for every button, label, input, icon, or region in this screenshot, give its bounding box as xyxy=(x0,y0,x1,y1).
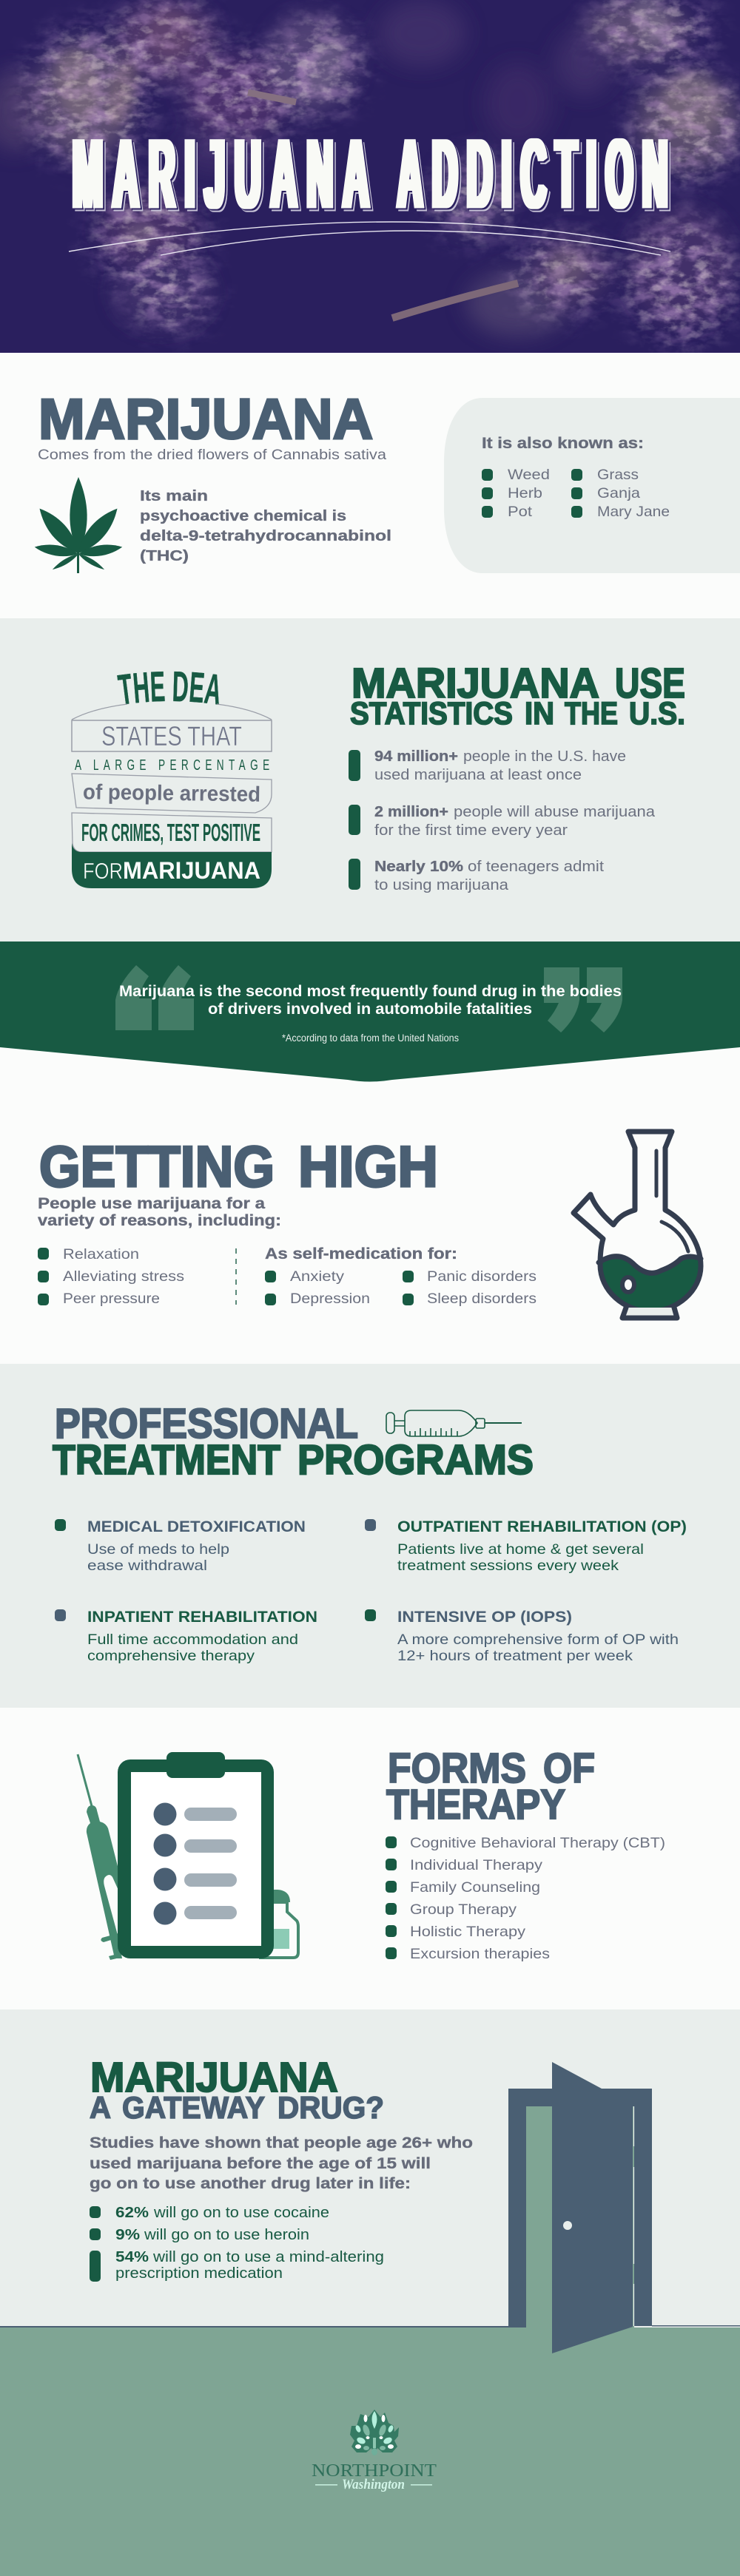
list: self-medication: Sleep disorders xyxy=(427,1291,536,1307)
text: origin: Comes from the dried flowers of Cannabis sativa xyxy=(38,447,386,463)
item: intensive outpatient: INTENSIVE OP (IOPS) xyxy=(397,1609,572,1626)
decorative title swoosh xyxy=(69,222,670,255)
list: street names: Herb xyxy=(508,485,542,501)
heading: forms of therapy: FORMS xyxy=(388,1745,526,1792)
panel: getting high xyxy=(38,1132,701,1318)
heading: a gateway drug xyxy=(90,2054,384,2125)
heading: marijuana use statistics: STATISTICS xyxy=(350,696,513,731)
list: therapies: Individual Therapy xyxy=(410,1857,542,1873)
heading: forms of therapy: THERAPY xyxy=(386,1781,565,1828)
stat: prescription medication: prescription medication xyxy=(115,2265,283,2282)
badge: DEA statement: FOR CRIMES, TEST POSITIVE xyxy=(81,819,260,846)
stat: 94 million: people in the U.S. have xyxy=(463,748,626,765)
text: gateway study: go on to use another drug later in life: xyxy=(90,2175,411,2192)
list: street names: Ganja xyxy=(597,485,640,501)
text: gateway study: used marijuana before the age of 15 will xyxy=(90,2155,431,2172)
badge: DEA statement: A LARGE PERCENTAGE xyxy=(75,757,269,774)
list: street names: Mary Jane xyxy=(597,504,670,520)
list: therapies: Cognitive Behavioral Therapy (CBT) xyxy=(410,1835,665,1851)
text: THC description xyxy=(140,487,391,564)
list: street names: Pot xyxy=(508,504,533,520)
stat: 94 million: used marijuana at least once xyxy=(374,767,582,783)
heading: forms of therapy: OF xyxy=(543,1745,595,1792)
list: therapies: Group Therapy xyxy=(410,1901,517,1918)
icon: bong xyxy=(574,1132,701,1318)
stat: nearly 10 percent: to using marijuana xyxy=(374,877,509,893)
stat: 94 million xyxy=(349,748,626,783)
icon: clipboard xyxy=(118,1752,274,1958)
list: street names xyxy=(482,467,670,520)
item: medical detoxification: ease withdrawal xyxy=(87,1558,207,1574)
stat: 2 million xyxy=(349,804,656,839)
panel: also known as xyxy=(444,398,740,573)
badge: DEA statement: STATES THAT xyxy=(101,721,242,751)
list: self-medication xyxy=(265,1245,536,1307)
text: gateway study xyxy=(90,2134,473,2192)
heading: a gateway drug: A xyxy=(90,2090,111,2125)
text: THC description: (THC) xyxy=(140,547,189,564)
text: quote xyxy=(119,983,622,1018)
item: medical detoxification xyxy=(55,1518,306,1574)
list: reasons: Alleviating stress xyxy=(63,1268,184,1285)
stat: cocaine xyxy=(90,2205,329,2221)
item: outpatient rehabilitation: Patients live at home & get several xyxy=(397,1541,644,1558)
heading: marijuana use statistics xyxy=(350,660,685,731)
stat: 2 million: 2 million+ xyxy=(374,804,448,820)
stat: 2 million: for the first time every year xyxy=(374,822,568,839)
list: reasons: Peer pressure xyxy=(63,1291,160,1307)
list: self-medication: Anxiety xyxy=(290,1268,344,1285)
badge: DEA statement: of people arrested xyxy=(83,780,260,807)
item: outpatient rehabilitation: treatment sessions every week xyxy=(397,1558,619,1574)
text: quote: of drivers involved in automobile fatalities xyxy=(208,1001,532,1018)
text: washington script: Washington xyxy=(342,2477,405,2492)
panel: quote banner xyxy=(0,942,740,1081)
text: gateway study: Studies have shown that people age 26+ who xyxy=(90,2134,473,2151)
list: self-medication: As self-medication for: xyxy=(265,1245,457,1262)
heading: professional treatment programs: PROFESSIONAL xyxy=(55,1400,358,1447)
heading: professional treatment programs xyxy=(53,1400,534,1484)
text: reasons intro: People use marijuana for a xyxy=(38,1195,265,1212)
stat: prescription medication: will go on to use a mind-altering xyxy=(152,2249,384,2265)
logo: northpoint washington xyxy=(312,2410,437,2492)
list: therapies: Excursion therapies xyxy=(410,1946,550,1962)
heading: a gateway drug: GATEWAY xyxy=(122,2090,265,2125)
list: therapies: Family Counseling xyxy=(410,1879,540,1896)
heading: also known as: It is also known as: xyxy=(482,435,644,452)
item: medical detoxification: MEDICAL DETOXIFICATION xyxy=(87,1518,306,1535)
heading: professional treatment programs: TREATMENT xyxy=(53,1436,280,1484)
item: outpatient rehabilitation xyxy=(365,1518,687,1574)
heading: forms of therapy xyxy=(386,1745,595,1828)
text: THC description: psychoactive chemical is xyxy=(140,507,346,524)
item: medical detoxification: Use of meds to help xyxy=(87,1541,229,1558)
stat: heroin xyxy=(90,2227,309,2243)
heading: a gateway drug: DRUG? xyxy=(278,2090,384,2125)
text: quote: Marijuana is the second most frequently found drug in the bodies xyxy=(119,983,622,1000)
icon: medicine bottle xyxy=(259,1890,298,1958)
heading: getting high: HIGH xyxy=(298,1134,438,1199)
badge: DEA statement xyxy=(71,672,272,888)
badge: DEA statement: MARIJUANA xyxy=(123,857,260,884)
stat: heroin: will go on to use heroin xyxy=(144,2227,309,2243)
stat: nearly 10 percent xyxy=(349,859,604,893)
item: inpatient rehabilitation xyxy=(55,1609,317,1664)
item: intensive outpatient: 12+ hours of treatment per week xyxy=(397,1648,633,1664)
list: street names: Grass xyxy=(597,467,639,483)
panel: hero banner xyxy=(0,0,740,353)
heading: marijuana use statistics: U.S. xyxy=(629,696,685,731)
icon: syringe xyxy=(386,1410,522,1436)
text: reasons intro: variety of reasons, including: xyxy=(38,1212,281,1229)
list: street names: Weed xyxy=(508,467,550,483)
icon: open door xyxy=(508,2062,652,2353)
heading: marijuana use statistics: THE xyxy=(565,696,618,731)
stat: nearly 10 percent: Nearly 10% xyxy=(374,859,463,875)
stat: 2 million: people will abuse marijuana xyxy=(454,804,656,820)
heading: getting high: GETTING xyxy=(39,1134,275,1199)
list: self-medication: Panic disorders xyxy=(427,1268,536,1285)
icon: closing quote mark xyxy=(544,967,622,1032)
item: inpatient rehabilitation: INPATIENT REHABILITATION xyxy=(87,1609,317,1626)
item: outpatient rehabilitation: OUTPATIENT REHABILITATION (OP) xyxy=(397,1518,687,1535)
stat: cocaine: 62% xyxy=(115,2205,149,2221)
heading: marijuana: MARIJUANA xyxy=(38,388,373,451)
stat: cocaine: will go on to use cocaine xyxy=(153,2205,329,2221)
panel: treatment programs xyxy=(0,1364,740,1708)
panel: getting high background xyxy=(0,1035,740,1364)
item: inpatient rehabilitation: Full time accommodation and xyxy=(87,1632,298,1648)
list: reasons: Relaxation xyxy=(63,1246,139,1262)
stat: prescription medication xyxy=(90,2249,384,2282)
list: therapies xyxy=(386,1835,665,1962)
item: inpatient rehabilitation: comprehensive therapy xyxy=(87,1648,255,1664)
list: therapies: Holistic Therapy xyxy=(410,1924,525,1940)
panel: footer xyxy=(0,2325,740,2576)
stat: heroin: 9% xyxy=(115,2227,140,2243)
icon: peacock emblem xyxy=(350,2410,399,2455)
icon: opening quote mark xyxy=(115,965,194,1030)
panel: use statistics xyxy=(0,618,740,942)
text: quote source: *According to data from the United Nations xyxy=(282,1032,459,1044)
stat: 94 million: 94 million+ xyxy=(374,748,458,765)
heading: marijuana use statistics: MARIJUANA xyxy=(352,660,599,707)
text: THC description: delta-9-tetrahydrocannabinol xyxy=(140,527,391,544)
text: reasons intro xyxy=(38,1195,281,1229)
stat: prescription medication: 54% xyxy=(115,2249,149,2265)
stat: nearly 10 percent: of teenagers admit xyxy=(468,859,604,875)
heading: professional treatment programs: PROGRAMS xyxy=(297,1436,534,1484)
heading: marijuana use statistics: USE xyxy=(615,660,685,707)
list: self-medication: Depression xyxy=(290,1291,370,1307)
icon: cannabis leaf xyxy=(33,477,124,573)
icon: syringe behind clipboard xyxy=(78,1754,122,1960)
heading: getting high xyxy=(39,1134,438,1199)
list: reasons xyxy=(38,1246,184,1307)
badge: DEA statement: THE DEA xyxy=(117,672,219,705)
text: THC description: Its main xyxy=(140,487,208,504)
heading: a gateway drug: MARIJUANA xyxy=(90,2054,338,2101)
heading: marijuana use statistics: IN xyxy=(525,696,554,731)
panel: gateway drug xyxy=(0,2009,740,2327)
panel: what is marijuana xyxy=(0,353,740,618)
item: intensive outpatient xyxy=(365,1609,679,1664)
item: intensive outpatient: A more comprehensive form of OP with xyxy=(397,1632,679,1648)
text: northpoint wordmark: NORTHPOINT xyxy=(312,2461,437,2481)
badge: DEA statement: FOR xyxy=(83,858,123,884)
panel: forms of therapy xyxy=(0,1708,740,2009)
